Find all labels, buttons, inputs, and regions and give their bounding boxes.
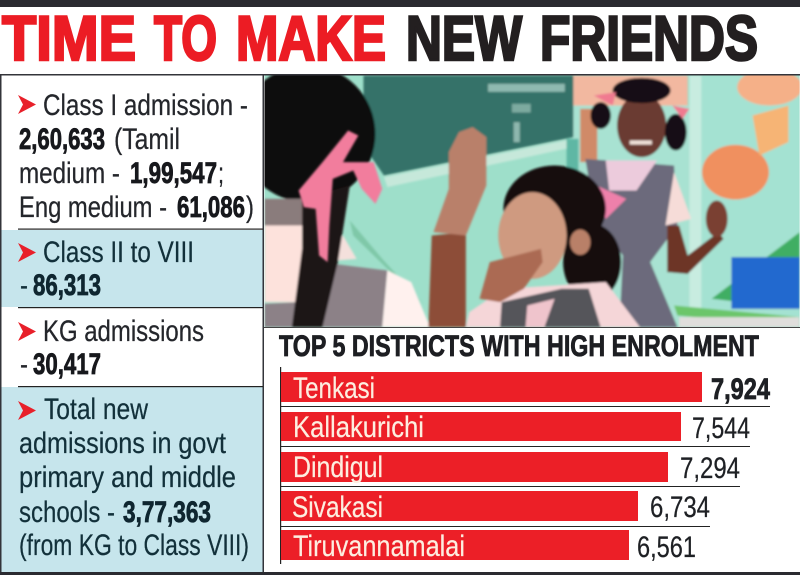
row: Total new admissions: Total new (44, 393, 148, 426)
bar: Tenkasi (281, 372, 770, 406)
row: Class II to VIII: - (20, 269, 28, 302)
bar: Sivakasi (281, 491, 710, 524)
bar: Sivakasi: 6,734 (650, 491, 710, 524)
row: Class I admission: (Tamil (114, 123, 180, 156)
row: Class I admission: ; (218, 157, 224, 190)
bar: Kallakurichi: 7,544 (692, 412, 750, 445)
bar: Tiruvannamalai: 6,561 (637, 531, 696, 564)
bottom rule (0, 572, 800, 575)
row: Class I admission (18, 89, 254, 224)
bar: Kallakurichi (281, 411, 750, 445)
row: Total new admissions: primary and middle (19, 461, 236, 494)
bar: Dindigul (281, 451, 740, 485)
bar: Tiruvannamalai: Tiruvannamalai (293, 530, 465, 563)
row: KG admissions: 30,417 (33, 348, 101, 381)
row: KG admissions: KG admissions (43, 315, 204, 348)
row: KG admissions (18, 315, 204, 381)
title: TIME (2, 4, 136, 74)
row: Total new admissions (18, 393, 249, 562)
bar: Dindigul: 7,294 (680, 452, 740, 485)
bar: Dindigul: Dindigul (293, 451, 383, 484)
row: Class I admission: Class I admission - (43, 89, 248, 122)
bar: Tenkasi: 7,924 (711, 373, 770, 406)
row: Class I admission: Eng medium - (19, 191, 167, 224)
row: Class I admission: 1,99,547 (130, 157, 217, 190)
row: Class II to VIII: Class II to VIII (43, 236, 194, 269)
row: Class I admission: 61,086 (177, 191, 245, 224)
bar chart: top 5 districts (280, 367, 770, 564)
row: KG admissions: - (20, 348, 28, 381)
title: TO (154, 4, 217, 74)
pink ribbon (299, 130, 382, 262)
bar: Kallakurichi: Kallakurichi (293, 411, 424, 444)
row: Class II to VIII (18, 236, 194, 302)
title: NEW (406, 4, 522, 74)
bar: Sivakasi: Sivakasi (292, 491, 383, 524)
row: Class II to VIII: 86,313 (33, 269, 101, 302)
row: Total new admissions: 3,77,363 (123, 496, 211, 529)
bar: Tiruvannamalai (281, 530, 696, 564)
row: Class I admission: medium - (19, 157, 120, 190)
row: Class I admission: ) (246, 191, 254, 224)
photo: schoolgirls in a classroom (239, 66, 800, 327)
row: Total new admissions: (from KG to Class VIII) (19, 529, 249, 562)
title (2, 4, 758, 74)
row: Total new admissions: schools - (19, 496, 115, 529)
row: Class I admission: 2,60,633 (19, 123, 105, 156)
bar: Tenkasi: Tenkasi (293, 372, 375, 405)
row: Total new admissions: admissions in govt (19, 427, 227, 460)
top bar (0, 0, 800, 7)
title: MAKE (236, 4, 386, 74)
